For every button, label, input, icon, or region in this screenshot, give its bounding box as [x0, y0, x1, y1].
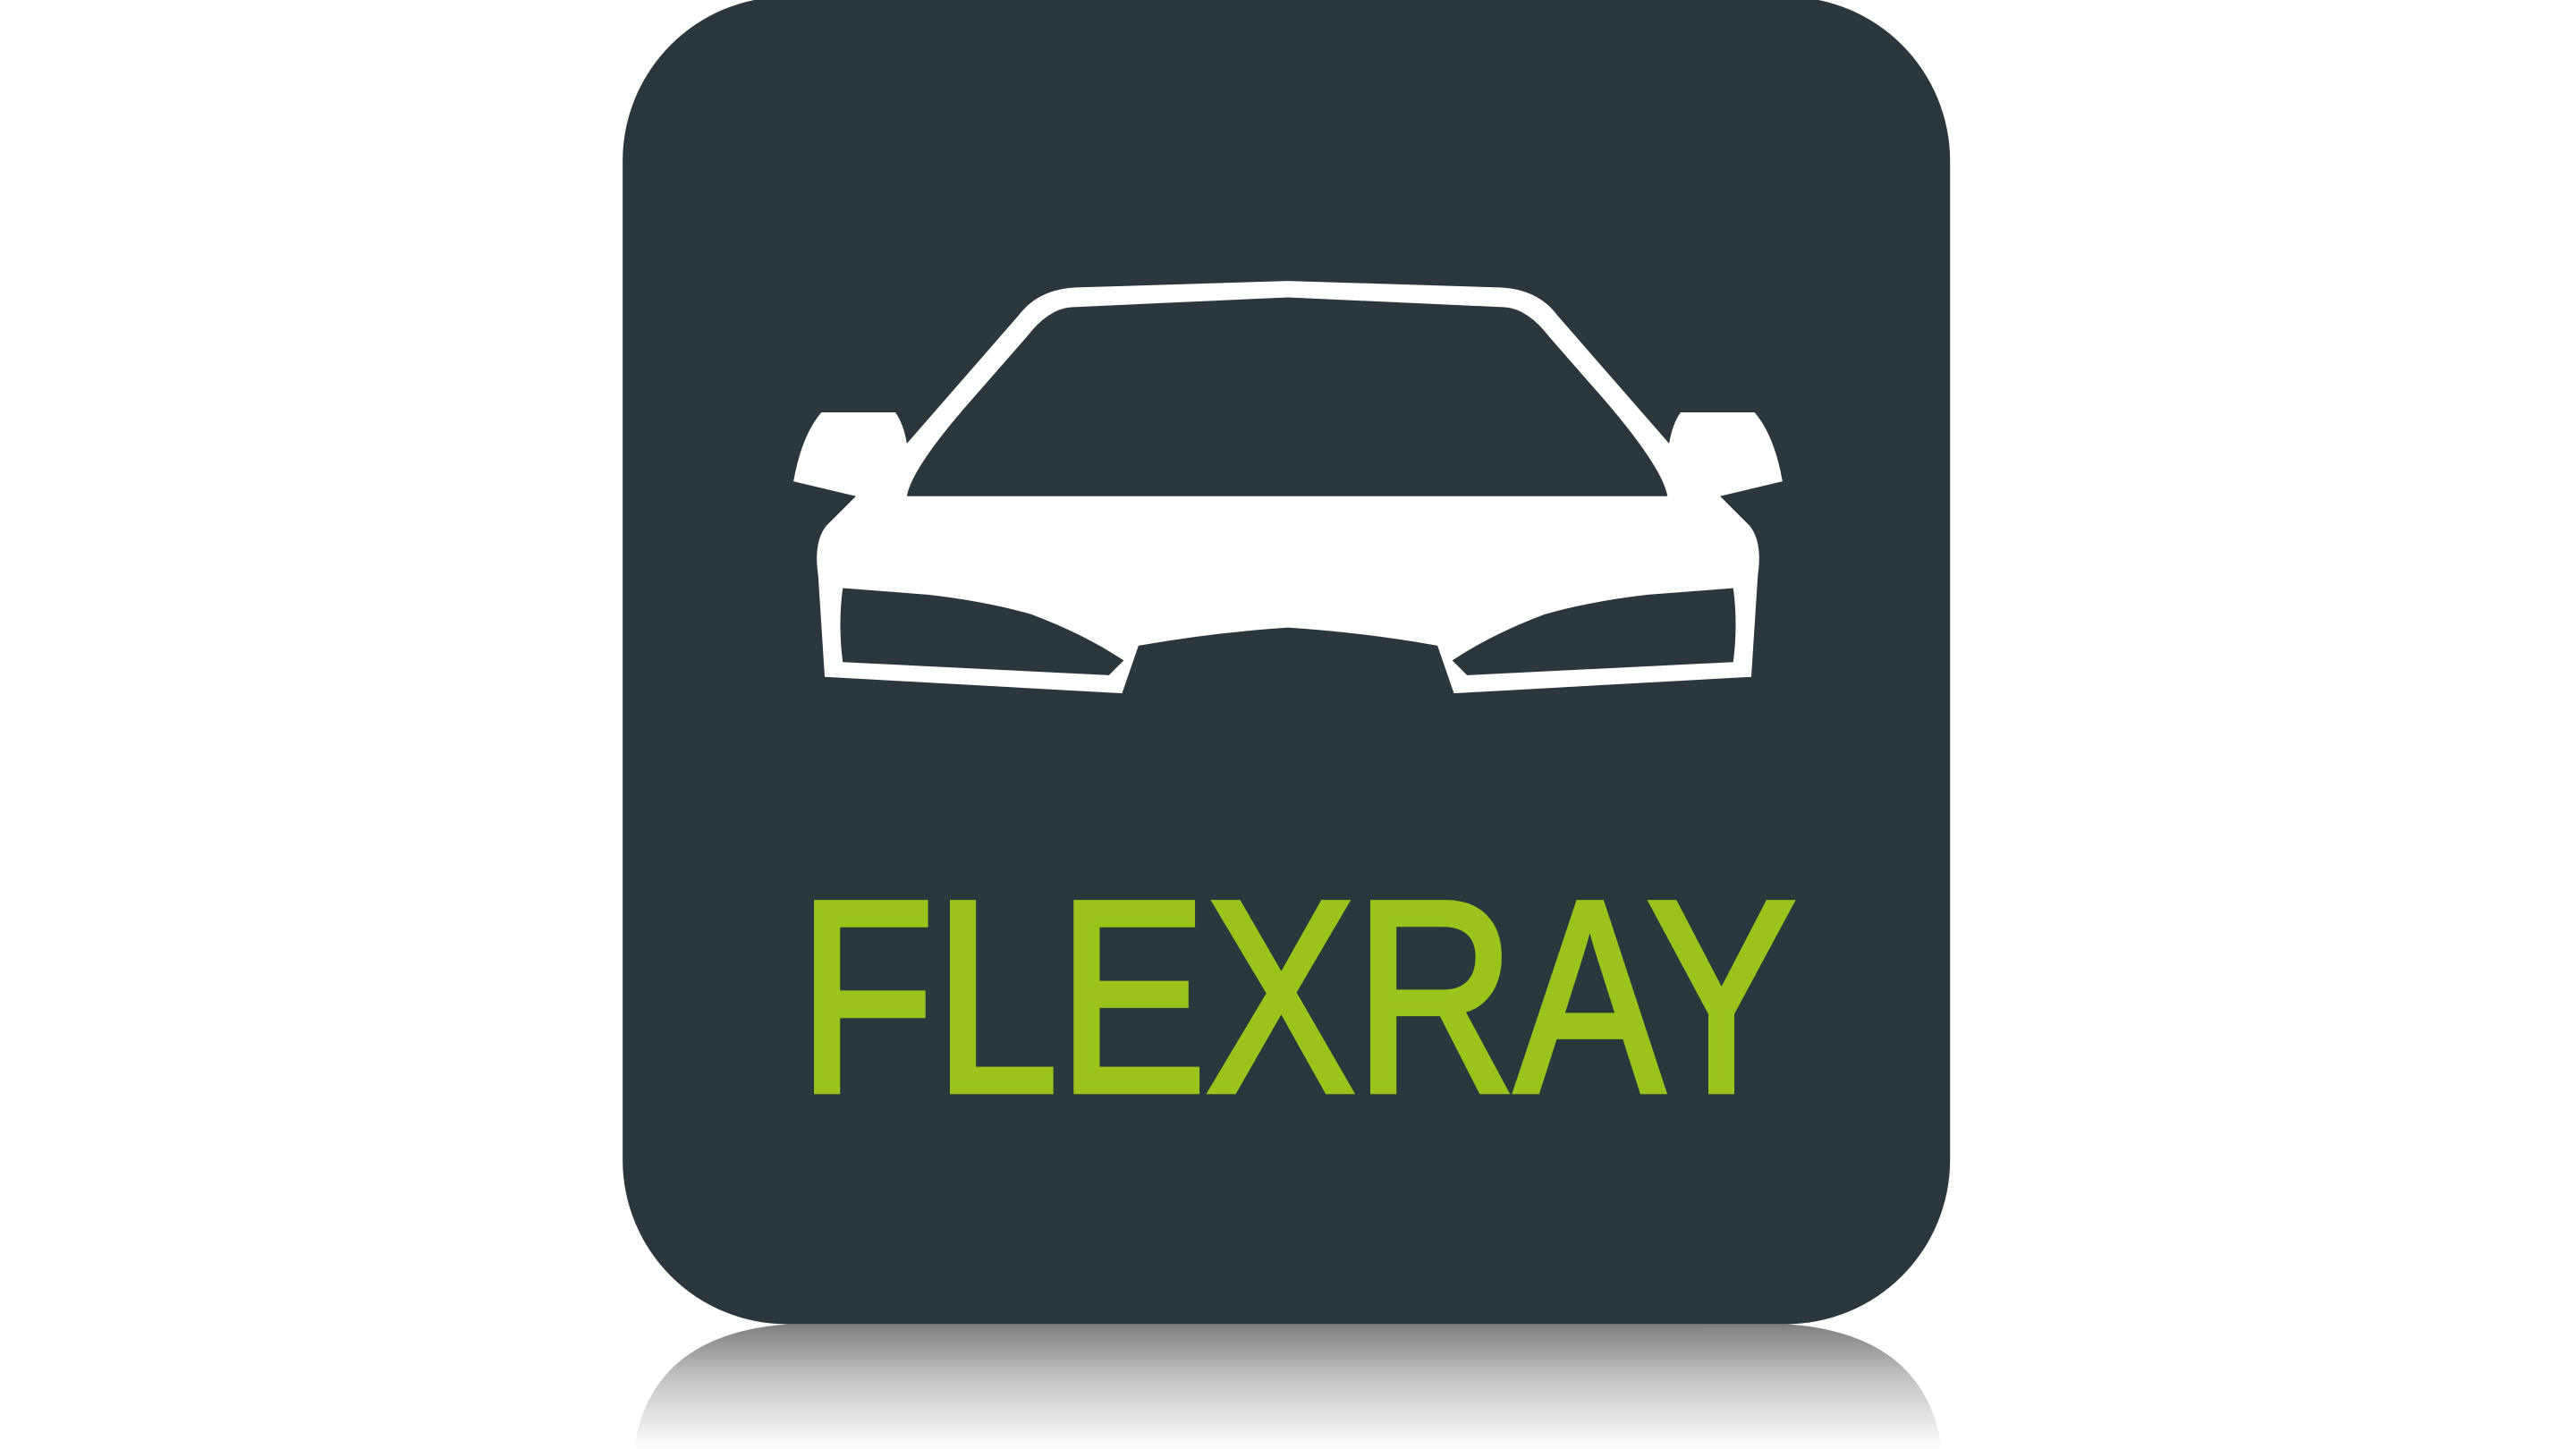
- panel: dark rounded square: [623, 0, 1950, 1324]
- icon: car: [793, 281, 1783, 693]
- reflection: [634, 1324, 1942, 1449]
- title: FLEXRAY: FLEXRAY: [799, 844, 1796, 1149]
